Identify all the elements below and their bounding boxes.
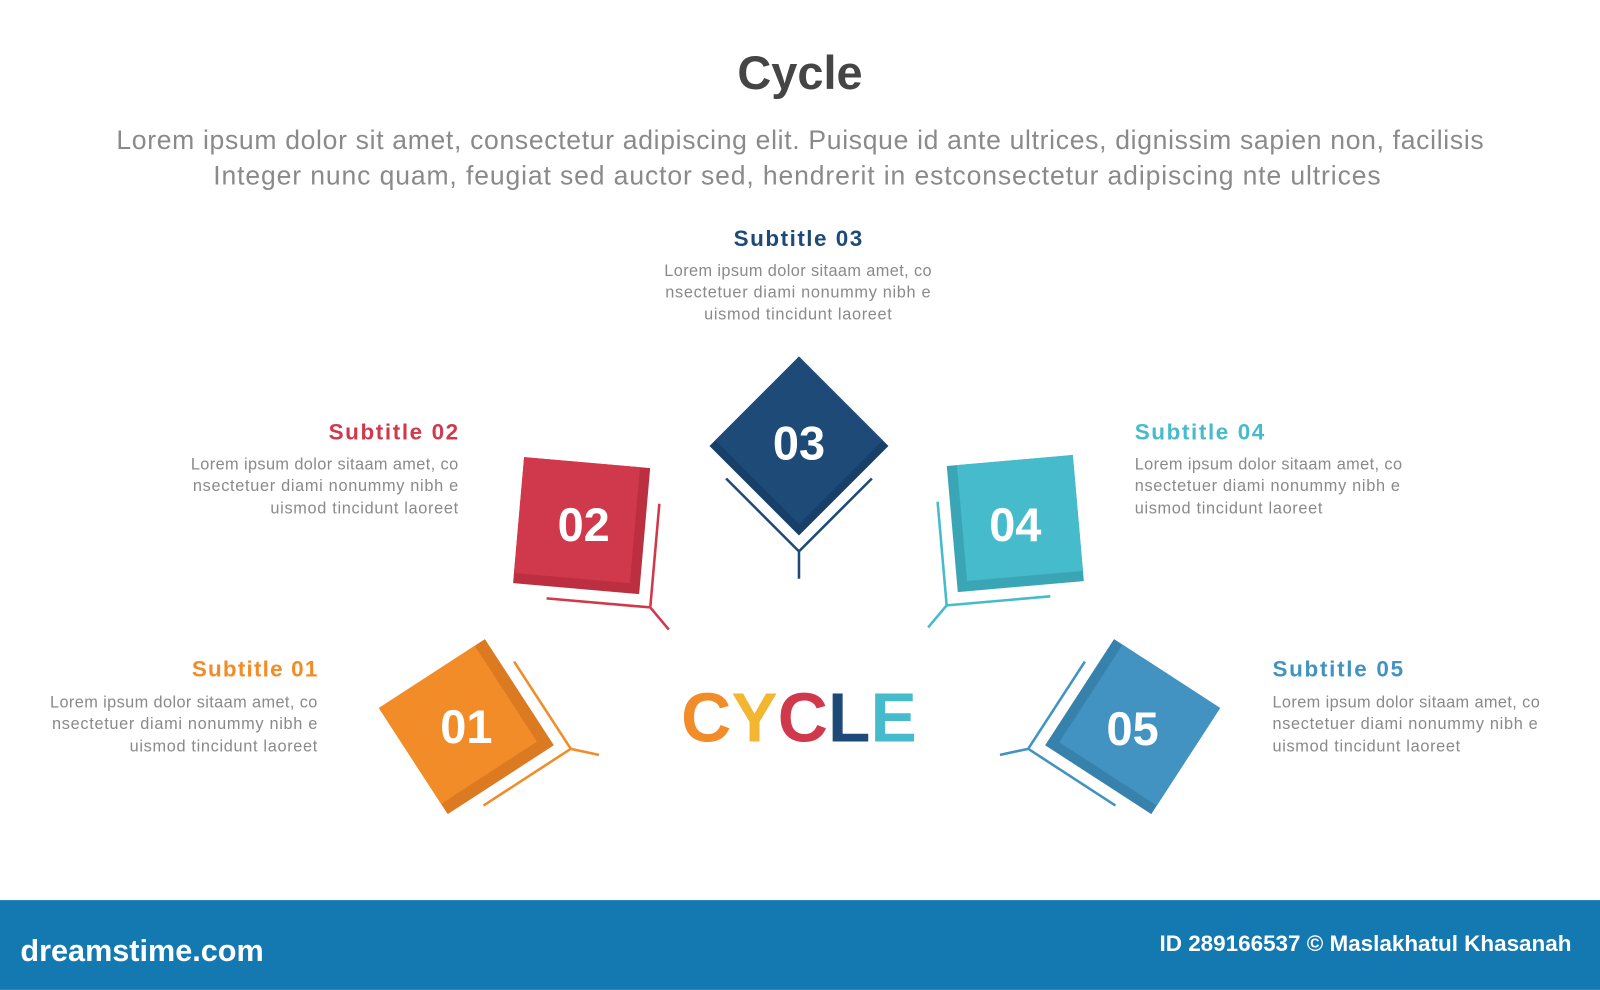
text block: subtitle 04: [1135, 420, 1402, 518]
box 03: 03: [773, 417, 825, 469]
text block: subtitle 03: uismod tincidunt laoreet: [704, 306, 892, 324]
box 01: 01: [440, 701, 492, 753]
text block: subtitle 01: uismod tincidunt laoreet: [130, 737, 318, 755]
text block: subtitle 03: Lorem ipsum dolor sitaam amet, co: [664, 262, 932, 280]
text block: subtitle 05: Lorem ipsum dolor sitaam amet, co: [1272, 693, 1540, 711]
intro text: Integer nunc quam, feugiat sed auctor sed, hendrerit in estconsectetur adipiscing nte ultrices: [213, 161, 1381, 191]
intro text: Lorem ipsum dolor sit amet, consectetur adipiscing elit. Puisque id ante ultrices, dignissim sapien non, facilisis: [116, 125, 1484, 155]
box 01: [379, 621, 599, 842]
text block: subtitle 05: [1272, 656, 1540, 755]
text block: subtitle 02: [191, 420, 459, 518]
text block: subtitle 03: Subtitle 03: [734, 226, 862, 251]
title: Cycle: [737, 47, 863, 99]
text block: subtitle 02: Subtitle 02: [329, 420, 458, 445]
text block: subtitle 04: uismod tincidunt laoreet: [1135, 500, 1323, 518]
footer bar: dreamstime.com: [20, 934, 264, 968]
text block: subtitle 01: Subtitle 01: [192, 656, 317, 681]
text block: subtitle 05: uismod tincidunt laoreet: [1272, 737, 1461, 755]
box 04: 04: [989, 499, 1041, 551]
text block: subtitle 05: nsectetuer diami nonummy nibh e: [1272, 715, 1538, 733]
box 05: 05: [1107, 703, 1159, 755]
text block: subtitle 04: nsectetuer diami nonummy nibh e: [1135, 477, 1400, 495]
box 02: [510, 457, 683, 630]
footer bar: [0, 900, 1600, 990]
text block: subtitle 01: [50, 656, 318, 755]
box 02: 02: [558, 499, 610, 551]
text block: subtitle 04: Lorem ipsum dolor sitaam amet, co: [1135, 456, 1402, 474]
text block: subtitle 02: nsectetuer diami nonummy nibh e: [193, 477, 458, 495]
text block: subtitle 01: Lorem ipsum dolor sitaam amet, co: [50, 693, 317, 711]
box 05: [1000, 621, 1220, 842]
text block: subtitle 05: Subtitle 05: [1272, 656, 1403, 681]
box 03: [688, 357, 910, 579]
text block: subtitle 03: [664, 226, 932, 324]
box 04: [914, 455, 1087, 627]
text block: subtitle 02: Lorem ipsum dolor sitaam amet, co: [191, 456, 458, 474]
center word CYCLE: CYCLE: [681, 679, 917, 757]
text block: subtitle 04: Subtitle 04: [1135, 420, 1265, 445]
text block: subtitle 01: nsectetuer diami nonummy nibh e: [52, 715, 317, 733]
footer bar: ID 289166537 © Maslakhatul Khasanah: [1160, 931, 1571, 956]
intro text: [116, 125, 1484, 191]
text block: subtitle 02: uismod tincidunt laoreet: [270, 500, 459, 518]
text block: subtitle 03: nsectetuer diami nonummy nibh e: [665, 283, 931, 301]
